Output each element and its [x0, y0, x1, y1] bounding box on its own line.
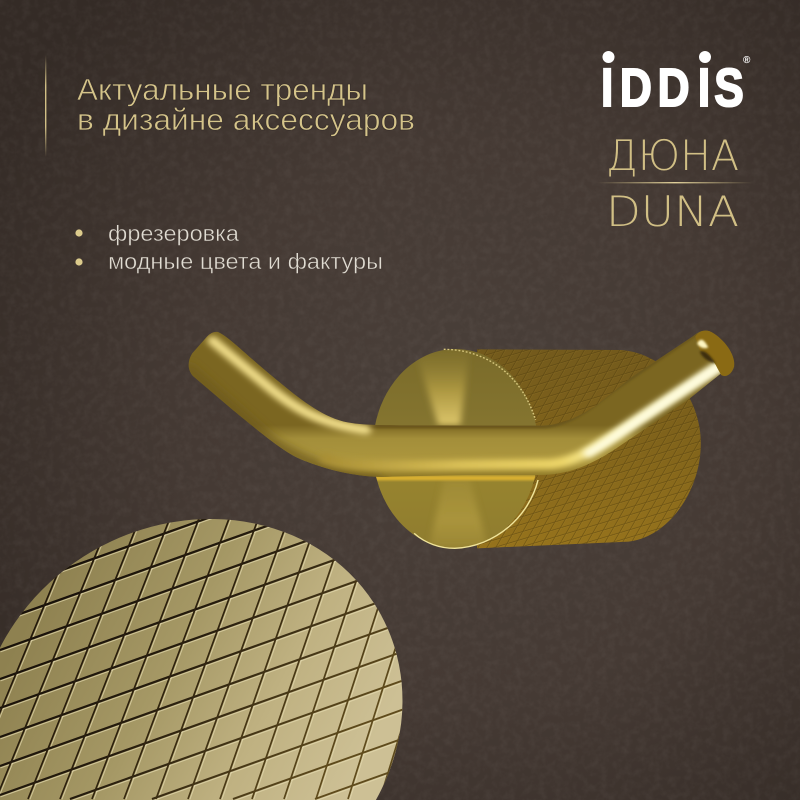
vertical accent rule — [45, 55, 46, 157]
heading — [77, 72, 415, 137]
bullet list — [75, 221, 383, 274]
product: double hook — [188, 331, 734, 548]
bullet item 2: модные цвета и фактуры — [108, 249, 383, 274]
logo: IDDIS: ® — [743, 55, 751, 66]
collection name: Duna: DUNA — [606, 187, 739, 236]
collection name: Дюна: ДЮНА — [606, 131, 739, 180]
heading: в дизайне аксессуаров — [77, 102, 415, 137]
knurled cylinder body — [477, 349, 701, 548]
hook end cap — [695, 331, 734, 376]
hook tube — [188, 331, 721, 479]
bullet item 1: фрезеровка — [108, 221, 240, 246]
divider — [597, 182, 753, 183]
logo: IDDIS: IDDIS — [601, 58, 744, 118]
front disc — [373, 349, 540, 548]
heading: Актуальные тренды — [77, 72, 368, 107]
texture close-up circle — [0, 519, 402, 800]
